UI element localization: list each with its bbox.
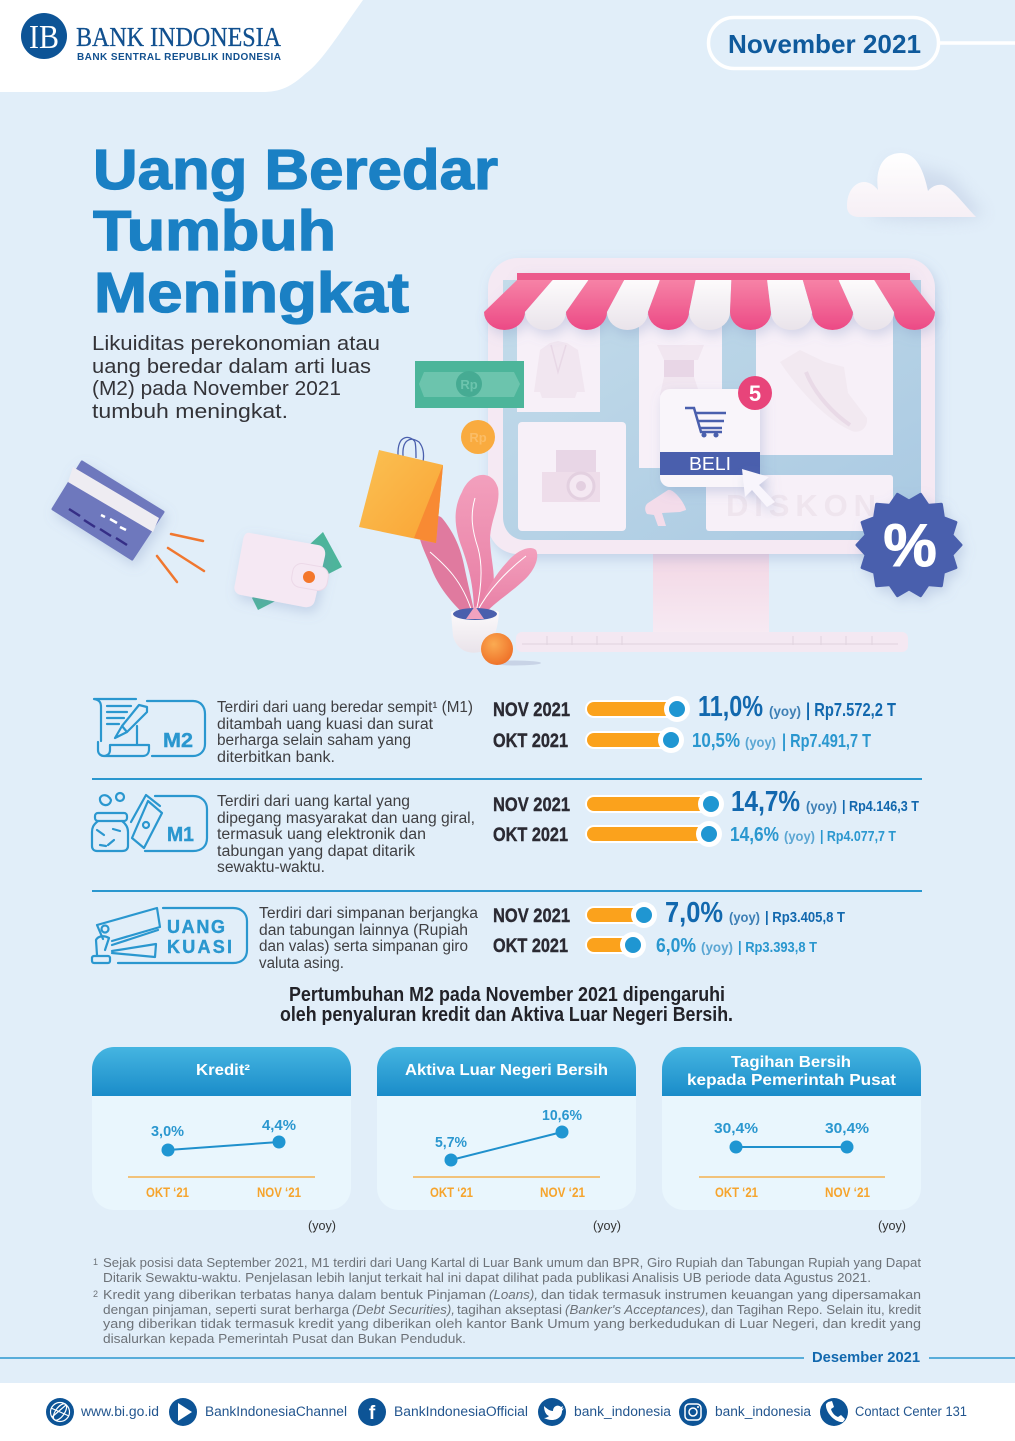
social: Contact Center: Contact Center 131 — [855, 1404, 967, 1419]
icon: cursor — [742, 469, 775, 507]
social: website: www.bi.go.id — [80, 1404, 159, 1419]
panel: M2 — [94, 691, 896, 766]
social: Twitter: bank_indonesia — [574, 1404, 671, 1419]
footnotes: dan tidak termasuk instrumen keuangan yang dipersamakan — [541, 1287, 921, 1302]
notification badge — [738, 376, 772, 410]
section heading — [280, 984, 733, 1026]
icon: M1 jar and money — [92, 793, 207, 851]
M2 October row: (yoy) — [745, 734, 776, 750]
logo: Bank Indonesia: BANK SENTRAL REPUBLIK INDONESIA — [77, 52, 281, 63]
icon: Uang Kuasi cards — [92, 908, 247, 963]
Uang Kuasi description: dan tabungan lainnya (Rupiah — [259, 922, 468, 939]
footnotes: yang diberikan tidak termasuk kredit yang diberikan oleh kantor Bank Umum yang berkedudukan di Luar Negeri, dan kredit yang — [103, 1316, 921, 1331]
M2 description: diterbitkan bank. — [217, 749, 335, 766]
M2 November row: | Rp7.572,2 T — [806, 700, 896, 720]
social: Instagram: bank_indonesia — [715, 1404, 811, 1419]
social: Contact Center — [820, 1398, 967, 1426]
monitor stand — [653, 550, 769, 634]
footer bar — [0, 1383, 1015, 1441]
M1 description: sewaktu-waktu. — [217, 859, 325, 876]
M2 description: berharga selain saham yang — [217, 732, 411, 749]
M1 description: termasuk uang elektronik dan — [217, 826, 426, 843]
footnotes: (Loans), — [489, 1287, 538, 1302]
panel: Tagihan Bersih chart — [662, 1047, 921, 1210]
Uang Kuasi description — [259, 905, 478, 972]
product: dress — [639, 315, 722, 468]
line chart: Kredit: NOV ‘21 — [257, 1184, 301, 1200]
header logo panel — [0, 0, 363, 92]
Uang Kuasi November row: NOV 2021 — [493, 905, 570, 927]
line chart: Aktiva: OKT ‘21 — [430, 1184, 473, 1200]
icon: cloud — [847, 153, 985, 220]
Uang Kuasi description: dan valas) serta simpanan giro — [259, 938, 468, 955]
footnotes: disalurkan kepada Pemerintah Pusat dan Bukan Penduduk. — [103, 1331, 466, 1346]
social: Facebook: f — [369, 1403, 376, 1424]
buy card: BELI — [689, 454, 731, 474]
social: YouTube — [169, 1398, 347, 1426]
title: Meningkat — [94, 261, 409, 325]
Uang Kuasi October row — [493, 932, 817, 958]
line chart: Kredit — [128, 1117, 315, 1200]
icon: shopping bag — [359, 437, 443, 543]
subtitle — [92, 332, 380, 423]
title: Tumbuh — [93, 199, 336, 263]
panel: Aktiva Luar Negeri Bersih chart: Aktiva Luar Negeri Bersih — [405, 1062, 608, 1079]
footnotes: dan Tagihan Repo. Selain itu, kredit — [711, 1302, 921, 1317]
social: website — [46, 1398, 159, 1426]
title — [93, 138, 498, 325]
date badge: November 2021 — [728, 29, 921, 59]
M2 October row: | Rp7.491,7 T — [782, 731, 871, 751]
M1 description: Terdiri dari uang kartal yang — [217, 793, 410, 810]
Uang Kuasi November row: 7,0% — [665, 897, 723, 929]
panel: Aktiva Luar Negeri Bersih chart — [377, 1047, 636, 1210]
panel: M1 — [92, 786, 919, 876]
M2 description: ditambah uang kuasi dan surat — [217, 716, 434, 733]
M2 November row: 11,0% — [698, 691, 763, 723]
icon: megaphone — [645, 490, 686, 526]
M2 October row: OKT 2021 — [493, 730, 568, 752]
subtitle: uang beredar dalam arti luas — [92, 355, 371, 378]
pot — [451, 609, 499, 653]
M2 description — [217, 699, 473, 766]
social: Facebook: BankIndonesiaOfficial — [394, 1404, 528, 1419]
awning — [484, 273, 935, 330]
panel: Kredit chart — [92, 1047, 351, 1210]
unit label: (yoy) — [308, 1218, 336, 1233]
M1 November row: (yoy) — [806, 798, 837, 814]
badge: percent — [857, 494, 961, 596]
M1 description: tabungan yang dapat ditarik — [217, 843, 415, 860]
unit label: (yoy) — [593, 1218, 621, 1233]
M1 October row: | Rp4.077,7 T — [820, 828, 896, 845]
panel: M1: M1 — [167, 824, 194, 846]
illustration: online shop monitor — [484, 258, 961, 652]
section heading: oleh penyaluran kredit dan Aktiva Luar Negeri Bersih. — [280, 1004, 733, 1026]
icon: M2 document — [94, 699, 205, 756]
icon: wallet — [234, 532, 342, 610]
subtitle: Likuiditas perekonomian atau — [92, 332, 380, 355]
panel: Uang Kuasi — [92, 897, 845, 972]
Uang Kuasi October row: 6,0% — [656, 935, 696, 957]
social: Instagram — [679, 1398, 811, 1426]
M1 November row: NOV 2021 — [493, 794, 570, 816]
M2 November row — [493, 691, 896, 723]
logo: Bank Indonesia: BANK INDONESIA — [76, 22, 281, 52]
line chart: Tagihan: NOV ‘21 — [825, 1184, 870, 1200]
Uang Kuasi label: UANG — [167, 917, 225, 937]
footnotes: (Debt Securities), — [352, 1302, 455, 1317]
product: camera — [518, 422, 626, 531]
icon: coin — [461, 420, 495, 454]
line chart: Tagihan: OKT ‘21 — [715, 1184, 758, 1200]
footnotes: 1 — [93, 1257, 98, 1267]
icon: credit card — [53, 462, 163, 559]
footnotes: tagihan akseptasi — [457, 1302, 562, 1317]
line chart: Aktiva: 10,6% — [542, 1107, 582, 1124]
monitor frame — [488, 258, 935, 554]
panel: Kredit chart: Kredit² — [196, 1062, 250, 1079]
M1 November row: 14,7% — [731, 786, 800, 818]
line chart: Tagihan: 30,4% — [825, 1120, 869, 1137]
badge: percent: % — [883, 512, 937, 579]
product: shoe — [756, 315, 893, 455]
keyboard — [516, 632, 908, 652]
banner: diskon: DISKON — [726, 488, 876, 523]
M2 October row — [493, 727, 871, 753]
line chart: Aktiva: NOV ‘21 — [540, 1184, 585, 1200]
Uang Kuasi November row: (yoy) — [729, 909, 760, 925]
social: Facebook — [358, 1398, 528, 1426]
footnotes: 2 — [93, 1289, 98, 1299]
unit label: (yoy) — [878, 1218, 906, 1233]
footnotes: (Banker's Acceptances), — [565, 1302, 709, 1317]
line chart: Kredit: 3,0% — [151, 1123, 184, 1140]
line chart: Kredit: OKT ‘21 — [146, 1184, 189, 1200]
M2 description: Terdiri dari uang beredar sempit¹ (M1) — [217, 699, 473, 716]
Uang Kuasi October row: OKT 2021 — [493, 935, 568, 957]
Uang Kuasi label: KUASI — [167, 937, 232, 957]
notification badge: 5 — [749, 381, 761, 406]
publication date line: Desember 2021 — [812, 1349, 920, 1366]
M2 November row: (yoy) — [769, 703, 801, 719]
M1 description — [217, 793, 475, 876]
section heading: Pertumbuhan M2 pada November 2021 dipengaruhi — [289, 984, 725, 1006]
icon: orange ball — [481, 633, 541, 666]
banner: diskon — [706, 475, 893, 531]
icon: shopping cart — [685, 408, 726, 436]
M1 November row — [493, 786, 919, 818]
footnotes: Sejak posisi data September 2021, M1 terdiri dari Uang Kartal di Luar Bank umum dan BPR, Giro Rupiah dan Tabungan Rupiah yang Dapat — [103, 1255, 921, 1270]
social: Twitter — [538, 1398, 671, 1426]
line chart: Aktiva: 5,7% — [435, 1134, 467, 1151]
date badge — [708, 18, 1015, 68]
logo: Bank Indonesia: IB — [29, 19, 59, 56]
Uang Kuasi label — [167, 917, 232, 957]
M1 November row: | Rp4.146,3 T — [842, 798, 919, 815]
panel: M2: M2 — [163, 730, 193, 752]
M1 October row: 14,6% — [730, 824, 779, 846]
Uang Kuasi October row: | Rp3.393,8 T — [738, 939, 817, 956]
M1 October row: OKT 2021 — [493, 824, 568, 846]
panel: Tagihan Bersih chart: kepada Pemerintah Pusat — [687, 1072, 896, 1089]
Uang Kuasi description: valuta asing. — [259, 955, 344, 972]
line chart: Tagihan — [699, 1120, 885, 1200]
social: YouTube: BankIndonesiaChannel — [205, 1404, 347, 1419]
line chart: Tagihan: 30,4% — [714, 1120, 758, 1137]
Uang Kuasi November row — [493, 897, 845, 929]
product: jacket — [517, 315, 600, 412]
screen — [503, 280, 921, 540]
logo: Bank Indonesia — [21, 13, 281, 63]
buy card — [660, 389, 760, 487]
footnotes: dengan pinjaman, seperti surat berharga — [103, 1302, 350, 1317]
Uang Kuasi description: Terdiri dari simpanan berjangka — [259, 905, 478, 922]
footnotes: Kredit yang diberikan terbatas hanya dalam bentuk Pinjaman — [103, 1287, 486, 1302]
subtitle: (M2) pada November 2021 — [92, 377, 341, 400]
Uang Kuasi November row: | Rp3.405,8 T — [765, 909, 845, 926]
icon: plant — [418, 475, 537, 653]
footnotes: Ditarik Sewaktu-waktu. Penjelasan lebih lanjut terkait hal ini dapat dilihat pada publikasi Analisis UB periode data Agustus 2021. — [103, 1270, 871, 1285]
subtitle: tumbuh meningkat. — [92, 400, 288, 423]
icon: motion lines — [157, 534, 204, 582]
M2 November row: NOV 2021 — [493, 699, 570, 721]
line chart: Aktiva — [413, 1107, 600, 1200]
icon: banknote — [415, 361, 524, 408]
icon: banknote: Rp — [460, 377, 478, 392]
M1 October row — [493, 821, 896, 847]
M1 description: dipegang masyarakat dan uang giral, — [217, 810, 475, 827]
M2 October row: 10,5% — [692, 730, 740, 752]
icon: coin: Rp — [469, 430, 487, 445]
Uang Kuasi October row: (yoy) — [701, 939, 733, 955]
panel: Tagihan Bersih chart: Tagihan Bersih — [731, 1054, 851, 1071]
title: Uang Beredar — [93, 138, 498, 202]
line chart: Kredit: 4,4% — [262, 1117, 296, 1134]
M1 October row: (yoy) — [784, 828, 815, 844]
footnotes — [93, 1255, 921, 1346]
